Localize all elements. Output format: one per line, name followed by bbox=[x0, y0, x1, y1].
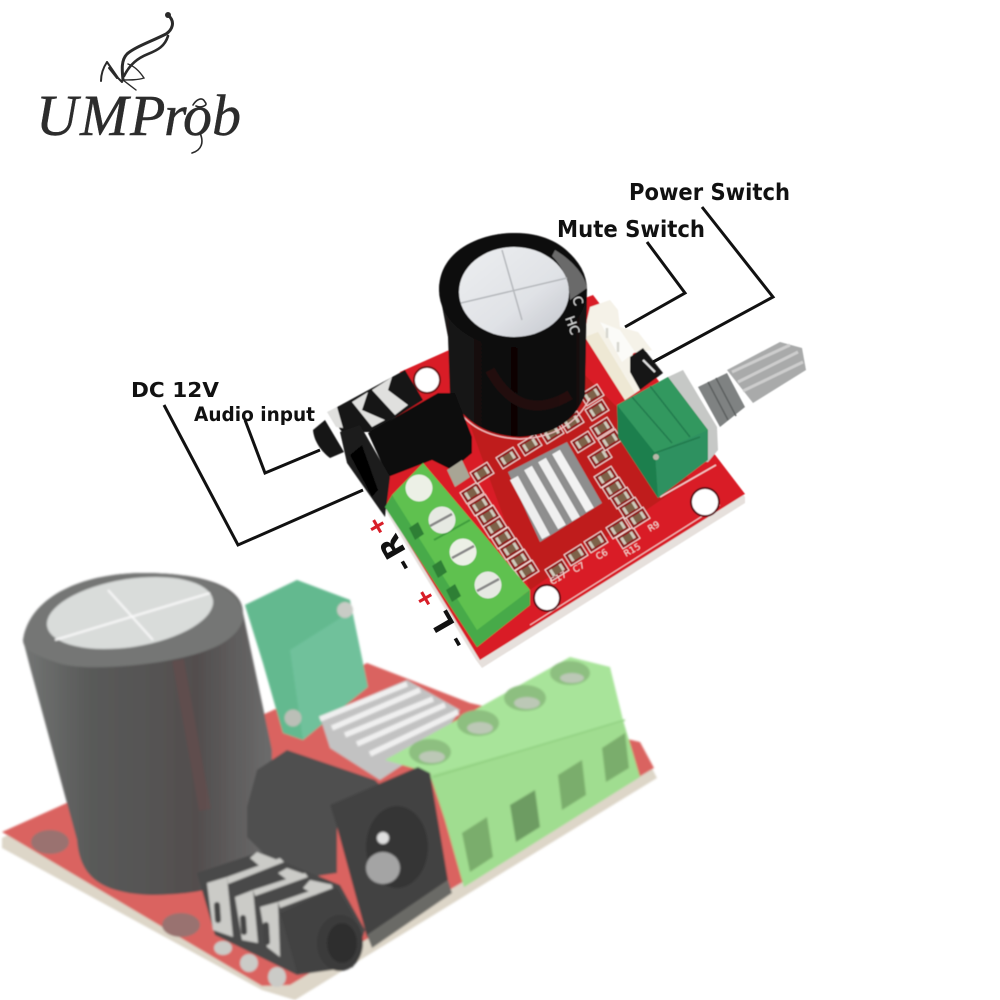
audio input jack bbox=[313, 370, 423, 458]
silkscreen labels: C6 bbox=[594, 548, 610, 563]
label: Power Switch: Power Switch bbox=[629, 180, 790, 206]
faded lower photo of the board bbox=[2, 566, 657, 1000]
silkscreen labels bbox=[548, 520, 662, 588]
right channel minus: - bbox=[388, 553, 420, 577]
large black capacitor: HC bbox=[561, 314, 582, 337]
callout line: DC 12V bbox=[164, 405, 363, 545]
faded capacitor bbox=[23, 566, 272, 895]
black DC power jack bbox=[340, 393, 472, 517]
left channel minus: - bbox=[441, 630, 473, 654]
black jumper bbox=[630, 348, 663, 390]
label: DC 12V: DC 12V bbox=[131, 378, 220, 402]
logo feather mark bbox=[101, 12, 206, 153]
red circuit board bbox=[385, 295, 745, 668]
main photo of the board bbox=[313, 233, 806, 668]
large black capacitor bbox=[439, 233, 590, 439]
label: Mute Switch: Mute Switch bbox=[557, 217, 705, 243]
silkscreen labels: C7 bbox=[572, 561, 587, 576]
right channel letter: R bbox=[372, 529, 413, 565]
callout line: Mute Switch bbox=[625, 242, 685, 327]
surface-mount components bbox=[460, 384, 650, 582]
callout line: Audio input bbox=[245, 420, 320, 473]
green potentiometer with shaft bbox=[617, 342, 806, 498]
silkscreen labels: R9 bbox=[646, 520, 662, 535]
faded audio jack bbox=[197, 852, 365, 987]
faded screw terminal bbox=[385, 657, 640, 887]
logo wordmark: UMProb bbox=[36, 83, 241, 148]
left channel plus: + bbox=[410, 581, 440, 616]
faded heatsink bbox=[320, 680, 460, 780]
aluminium heatsink bbox=[508, 442, 602, 542]
right channel plus: + bbox=[362, 509, 392, 544]
white two-pin connector bbox=[585, 300, 652, 400]
large black capacitor: C bbox=[568, 294, 585, 308]
callout line: Power Switch bbox=[653, 207, 773, 362]
faded board bbox=[2, 663, 657, 1000]
speaker polarity labels bbox=[362, 509, 473, 654]
label: Audio input: Audio input bbox=[194, 403, 315, 426]
faded potentiometer bbox=[245, 580, 368, 740]
green screw terminal bbox=[385, 463, 530, 647]
silkscreen labels: R15 bbox=[622, 542, 643, 560]
silkscreen labels: C17 bbox=[548, 570, 569, 588]
logo: UMProb bbox=[36, 12, 241, 153]
faded power jack bbox=[247, 750, 452, 948]
left channel letter: L bbox=[423, 605, 462, 638]
